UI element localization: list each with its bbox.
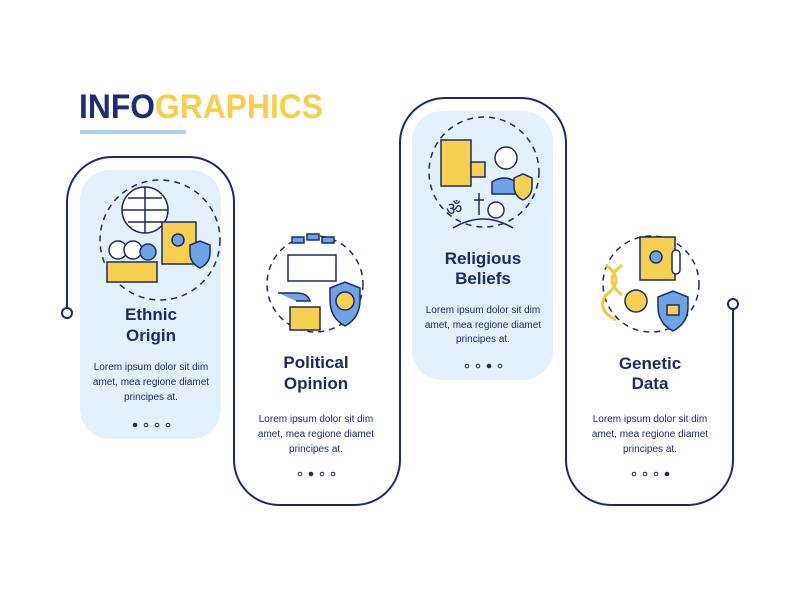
- icon: genetic data: [603, 236, 699, 332]
- text: religious beliefs: [425, 249, 541, 368]
- text: ethnic origin: Ethnic: [125, 305, 177, 324]
- title: INFOGRAPHICS: [79, 88, 323, 126]
- text: ethnic origin: Lorem ipsum dolor sit dim: [94, 362, 208, 373]
- text: genetic data: principes at.: [623, 444, 677, 455]
- text: ethnic origin: [93, 305, 209, 427]
- icon: religious beliefs: ॐ: [446, 199, 462, 219]
- icon: religious beliefs: [429, 117, 539, 228]
- text: religious beliefs: amet, mea regione diamet: [425, 320, 541, 331]
- text: political opinion: principes at.: [289, 444, 343, 455]
- text: ethnic origin: Origin: [126, 326, 176, 345]
- text: genetic data: [592, 354, 708, 476]
- text: religious beliefs: Religious: [445, 249, 521, 268]
- text: religious beliefs: principes at.: [456, 334, 510, 345]
- text: genetic data: amet, mea regione diamet: [592, 429, 708, 440]
- text: political opinion: Opinion: [284, 374, 348, 393]
- text: religious beliefs: Lorem ipsum dolor sit dim: [426, 305, 540, 316]
- text: political opinion: [258, 353, 374, 476]
- text: political opinion: Political: [283, 353, 349, 372]
- panel backgrounds: [80, 111, 553, 439]
- text: genetic data: Data: [632, 374, 669, 393]
- text: religious beliefs: Beliefs: [455, 269, 511, 288]
- text: political opinion: amet, mea regione diamet: [258, 429, 374, 440]
- text: ethnic origin: principes at.: [124, 392, 178, 403]
- icon: ethnic origin: [100, 180, 220, 300]
- text: ethnic origin: amet, mea regione diamet: [93, 377, 209, 388]
- text: genetic data: Lorem ipsum dolor sit dim: [593, 414, 707, 425]
- text: genetic data: Genetic: [619, 354, 681, 373]
- connector line: [62, 98, 738, 505]
- icon: political opinion: [267, 234, 363, 332]
- text: political opinion: Lorem ipsum dolor sit dim: [259, 414, 373, 425]
